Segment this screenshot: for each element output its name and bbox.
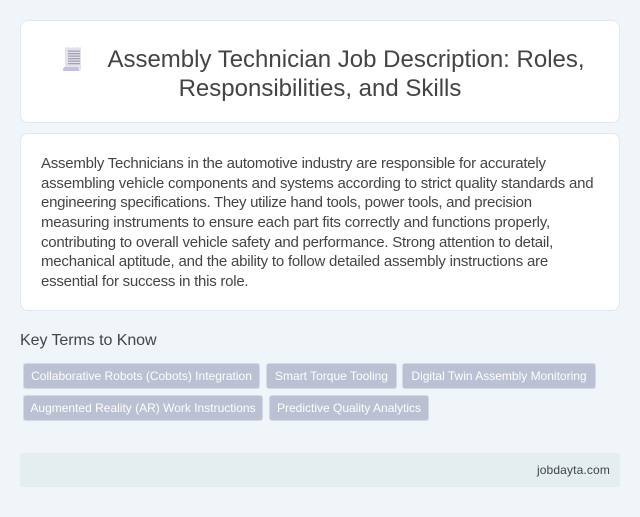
description text: assembling vehicle components and systems according to strict quality standards and [41,175,593,192]
panel: description card [20,133,620,311]
tag: augmented reality [23,395,263,421]
footer bar [20,453,620,487]
tag: cobots [23,363,260,389]
tag: digital twin [402,363,596,389]
panel: title card [20,20,620,123]
description text: contributing to overall vehicle safety and performance. Strong attention to detail, [41,234,553,251]
description text: mechanical aptitude, and the ability to follow detailed assembly instructions are [41,253,548,270]
footer: site name: jobdayta.com [537,463,610,477]
icon: paper scroll [63,47,81,71]
tag: smart torque [266,363,397,389]
tag: predictive quality: Predictive Quality Analytics [277,401,421,415]
description text: measuring instruments to ensure each part fits correctly and functions properly, [41,214,550,231]
title: Responsibilities, and Skills [179,75,461,102]
tag: smart torque: Smart Torque Tooling [275,369,388,383]
tag: cobots: Collaborative Robots (Cobots) Integration [31,369,252,383]
description text [41,155,593,290]
tag: predictive quality [269,395,429,421]
title: Assembly Technician Job Description: Roles, [107,46,585,73]
description text: essential for success in this role. [41,273,248,290]
description text: engineering specifications. They utilize hand tools, power tools, and precision [41,194,532,211]
tag: digital twin: Digital Twin Assembly Monitoring [411,369,587,383]
tag: augmented reality: Augmented Reality (AR) Work Instructions [30,401,256,415]
description text: Assembly Technicians in the automotive industry are responsible for accurately [41,155,546,172]
heading: key terms: Key Terms to Know [20,332,157,349]
title [107,46,585,102]
